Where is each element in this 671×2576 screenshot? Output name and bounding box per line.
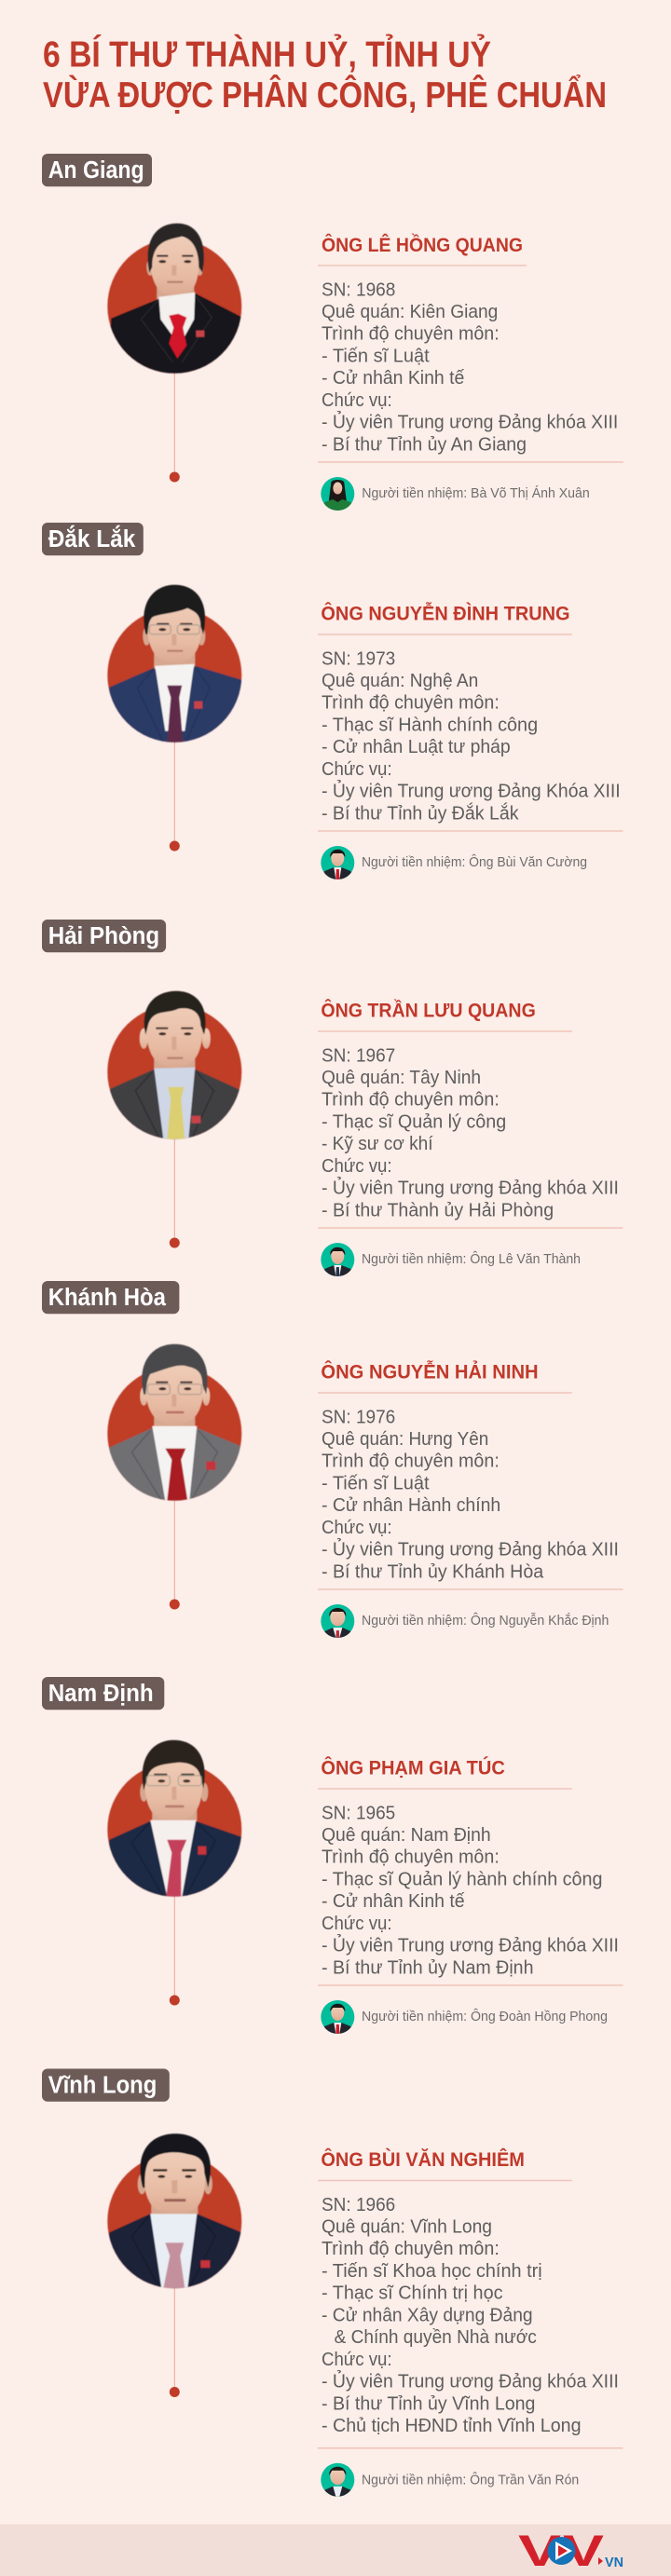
biography xyxy=(322,279,618,455)
biography: Quê quán: Nghệ An xyxy=(322,671,478,691)
biography xyxy=(322,648,621,824)
predecessor: Người tiền nhiệm: Ông Nguyễn Khắc Định xyxy=(362,1613,609,1629)
panel: Hải Phòng xyxy=(42,920,623,1276)
predecessor: Người tiền nhiệm: Ông Bùi Văn Cường xyxy=(362,854,587,870)
biography: - Ủy viên Trung ương Đảng Khóa XIII xyxy=(322,780,621,802)
biography xyxy=(322,1407,619,1582)
biography: SN: 1973 xyxy=(322,648,395,669)
portrait: Nguyễn Đình Trung xyxy=(107,585,243,743)
predecessor: Người tiền nhiệm: Ông Trần Văn Rón xyxy=(362,2473,579,2487)
biography: - Bí thư Thành ủy Hải Phòng xyxy=(322,1200,554,1220)
biography: Trình độ chuyên môn: xyxy=(322,2239,500,2259)
biography: - Tiến sĩ Khoa học chính trị xyxy=(322,2261,542,2282)
connector line and dot xyxy=(170,1138,180,1248)
biography: - Thạc sĩ Hành chính công xyxy=(322,715,538,735)
portrait: Nguyễn Hải Ninh xyxy=(107,1344,243,1501)
predecessor: Người tiền nhiệm: Ông Lê Văn Thành xyxy=(362,1251,581,1267)
biography: Trình độ chuyên môn: xyxy=(322,1452,500,1472)
biography: Chức vụ: xyxy=(322,1518,392,1538)
biography: Trình độ chuyên môn: xyxy=(322,693,500,714)
biography: - Cử nhân Xây dựng Đảng xyxy=(322,2305,533,2325)
logo: VOV.VN: V xyxy=(518,2526,562,2575)
biography: Trình độ chuyên môn: xyxy=(322,1847,500,1868)
title xyxy=(43,34,607,116)
biography: - Bí thư Tỉnh ủy Vĩnh Long xyxy=(322,2393,535,2414)
name: ÔNG BÙI VĂN NGHIÊM xyxy=(321,2148,525,2171)
biography: - Tiến sĩ Luật xyxy=(322,346,430,366)
biography: - Ủy viên Trung ương Đảng khóa XIII xyxy=(322,2370,619,2392)
biography xyxy=(322,1045,619,1220)
biography: - Kỹ sư cơ khí xyxy=(322,1134,433,1154)
logo: VOV.VN: VN xyxy=(605,2555,623,2570)
footer band xyxy=(0,2525,671,2576)
biography: Chức vụ: xyxy=(322,1156,392,1177)
biography: - Ủy viên Trung ương Đảng khóa XIII xyxy=(322,411,618,433)
biography: - Cử nhân Luật tư pháp xyxy=(322,737,511,757)
biography: - Ủy viên Trung ương Đảng khóa XIII xyxy=(322,1538,619,1561)
name: ÔNG NGUYỄN HẢI NINH xyxy=(321,1361,539,1383)
predecessor avatar xyxy=(321,1243,354,1276)
portrait: Lê Hồng Quang xyxy=(107,224,243,374)
biography: Quê quán: Vĩnh Long xyxy=(322,2217,492,2238)
name: ÔNG NGUYỄN ĐÌNH TRUNG xyxy=(321,603,570,625)
badge: An Giang: An Giang xyxy=(48,157,144,184)
biography: SN: 1966 xyxy=(322,2195,395,2215)
predecessor avatar xyxy=(321,846,354,879)
biography: - Bí thư Tỉnh ủy Nam Định xyxy=(322,1957,533,1978)
title: 6 BÍ THƯ THÀNH UỶ, TỈNH UỶ xyxy=(43,34,491,75)
biography: - Tiến sĩ Luật xyxy=(322,1473,430,1493)
name: ÔNG PHẠM GIA TÚC xyxy=(321,1757,505,1779)
predecessor avatar xyxy=(321,2463,354,2497)
biography: Quê quán: Hưng Yên xyxy=(322,1429,488,1450)
biography: - Ủy viên Trung ương Đảng khóa XIII xyxy=(322,1177,619,1199)
panel: Nam Định xyxy=(42,1677,623,2034)
biography: SN: 1965 xyxy=(322,1803,395,1823)
connector line and dot xyxy=(170,1896,180,2005)
connector line and dot xyxy=(170,1500,180,1610)
portrait: Phạm Gia Túc xyxy=(107,1740,243,1897)
name: ÔNG LÊ HỒNG QUANG xyxy=(322,234,523,256)
predecessor avatar xyxy=(321,477,354,511)
biography: Trình độ chuyên môn: xyxy=(322,324,500,345)
panel: An Giang xyxy=(42,154,623,511)
logo: VOV.VN xyxy=(518,2526,623,2575)
biography: Trình độ chuyên môn: xyxy=(322,1090,500,1111)
badge: Nam Định: Nam Định xyxy=(48,1681,154,1707)
biography: - Bí thư Tỉnh ủy Khánh Hòa xyxy=(322,1561,544,1582)
badge: Vĩnh Long: Vĩnh Long xyxy=(48,2072,157,2098)
biography: & Chính quyền Nhà nước xyxy=(335,2327,537,2348)
biography xyxy=(322,1803,619,1978)
biography: Quê quán: Nam Định xyxy=(322,1825,491,1846)
connector line and dot xyxy=(170,2288,180,2397)
biography: Chức vụ: xyxy=(322,2350,392,2370)
biography: - Ủy viên Trung ương Đảng khóa XIII xyxy=(322,1934,619,1956)
biography: - Thạc sĩ Chính trị học xyxy=(322,2283,503,2304)
portrait: Trần Lưu Quang xyxy=(107,991,243,1139)
connector line and dot xyxy=(170,742,180,852)
biography: - Thạc sĩ Quản lý hành chính công xyxy=(322,1869,602,1889)
badge: Hải Phòng: Hải Phòng xyxy=(48,923,159,949)
portrait: Bùi Văn Nghiêm xyxy=(107,2133,243,2288)
panel: Khánh Hòa xyxy=(42,1281,623,1638)
biography: SN: 1976 xyxy=(322,1407,395,1427)
biography: SN: 1968 xyxy=(322,279,395,300)
biography: Chức vụ: xyxy=(322,390,392,411)
biography: - Chủ tịch HĐND tỉnh Vĩnh Long xyxy=(322,2416,582,2436)
biography: - Bí thư Tỉnh ủy An Giang xyxy=(322,434,527,455)
biography: - Cử nhân Kinh tế xyxy=(322,368,464,388)
biography: Chức vụ: xyxy=(322,1914,392,1934)
predecessor: Người tiền nhiệm: Ông Đoàn Hồng Phong xyxy=(362,2009,608,2024)
predecessor avatar xyxy=(321,2000,354,2034)
panel: Vĩnh Long xyxy=(42,2068,623,2497)
panel: Đắk Lắk xyxy=(42,523,623,879)
biography: Quê quán: Kiên Giang xyxy=(322,302,498,322)
name: ÔNG TRẦN LƯU QUANG xyxy=(321,1000,536,1022)
biography: - Cử nhân Hành chính xyxy=(322,1495,500,1516)
biography: SN: 1967 xyxy=(322,1045,395,1066)
biography xyxy=(322,2195,619,2436)
connector line and dot xyxy=(170,373,180,483)
biography: - Bí thư Tỉnh ủy Đắk Lắk xyxy=(322,802,519,824)
badge: Đắk Lắk: Đắk Lắk xyxy=(48,525,136,552)
biography: Quê quán: Tây Ninh xyxy=(322,1068,481,1088)
biography: Chức vụ: xyxy=(322,759,392,780)
predecessor: Người tiền nhiệm: Bà Võ Thị Ánh Xuân xyxy=(362,485,590,501)
biography: - Thạc sĩ Quản lý công xyxy=(322,1111,506,1132)
predecessor avatar xyxy=(321,1604,354,1638)
logo: VOV.VN: V xyxy=(563,2526,605,2575)
badge: Khánh Hòa: Khánh Hòa xyxy=(48,1285,167,1311)
biography: - Cử nhân Kinh tế xyxy=(322,1891,465,1912)
